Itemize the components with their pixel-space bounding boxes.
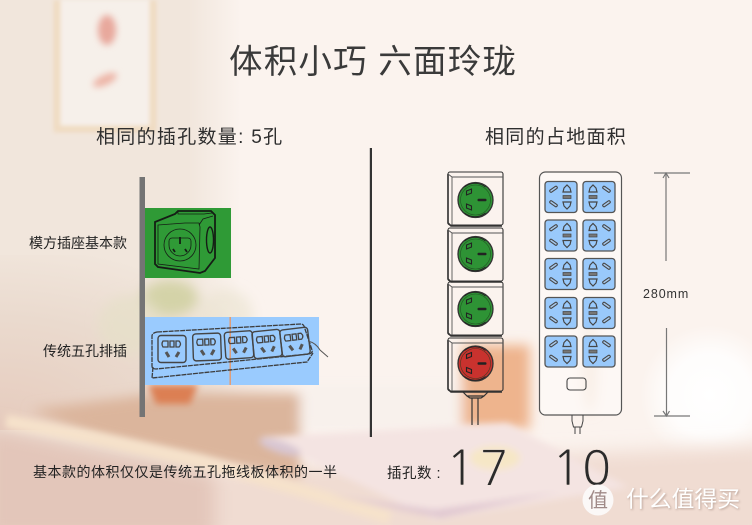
vertical axis [140, 177, 145, 417]
label: basic cube: 模方插座基本款 [29, 235, 127, 251]
switch [567, 378, 586, 390]
cube 4 red [448, 338, 503, 392]
cube 2 [448, 228, 503, 282]
title: 体积小巧 六面玲珑 [229, 44, 517, 81]
icon: stacked cube sockets [448, 172, 503, 425]
blue volume block [144, 317, 319, 385]
plug and cord [462, 391, 489, 425]
cube 3 [448, 282, 503, 336]
number: 10: 10 [552, 444, 611, 492]
center divider [370, 148, 372, 437]
caption: volume: 基本款的体积仅仅是传统五孔拖线板体积的一半 [33, 464, 338, 480]
number: 17: 17 [446, 444, 509, 492]
icon: cube socket [155, 211, 215, 273]
heading: same floor area: 相同的占地面积 [485, 126, 627, 148]
icon: traditional ten-socket strip [540, 172, 622, 434]
green volume block [144, 208, 231, 278]
watermark logo [582, 484, 740, 516]
orange centre line [230, 317, 231, 385]
label: socket count: 插孔数 : [387, 465, 441, 482]
icon: traditional power strip [152, 324, 328, 378]
cube 1 [448, 172, 503, 226]
watermark logo: 什么值得买 [626, 486, 740, 512]
plug [572, 415, 583, 434]
panel: volume comparison [140, 177, 328, 417]
dimension label: 280mm [643, 287, 689, 301]
label: traditional strip: 传统五孔排插 [43, 343, 127, 359]
watermark logo: 值 [588, 489, 608, 512]
heading: same socket count: 相同的插孔数量: 5孔 [96, 126, 283, 148]
dimension arrow: 280mm [654, 173, 690, 416]
